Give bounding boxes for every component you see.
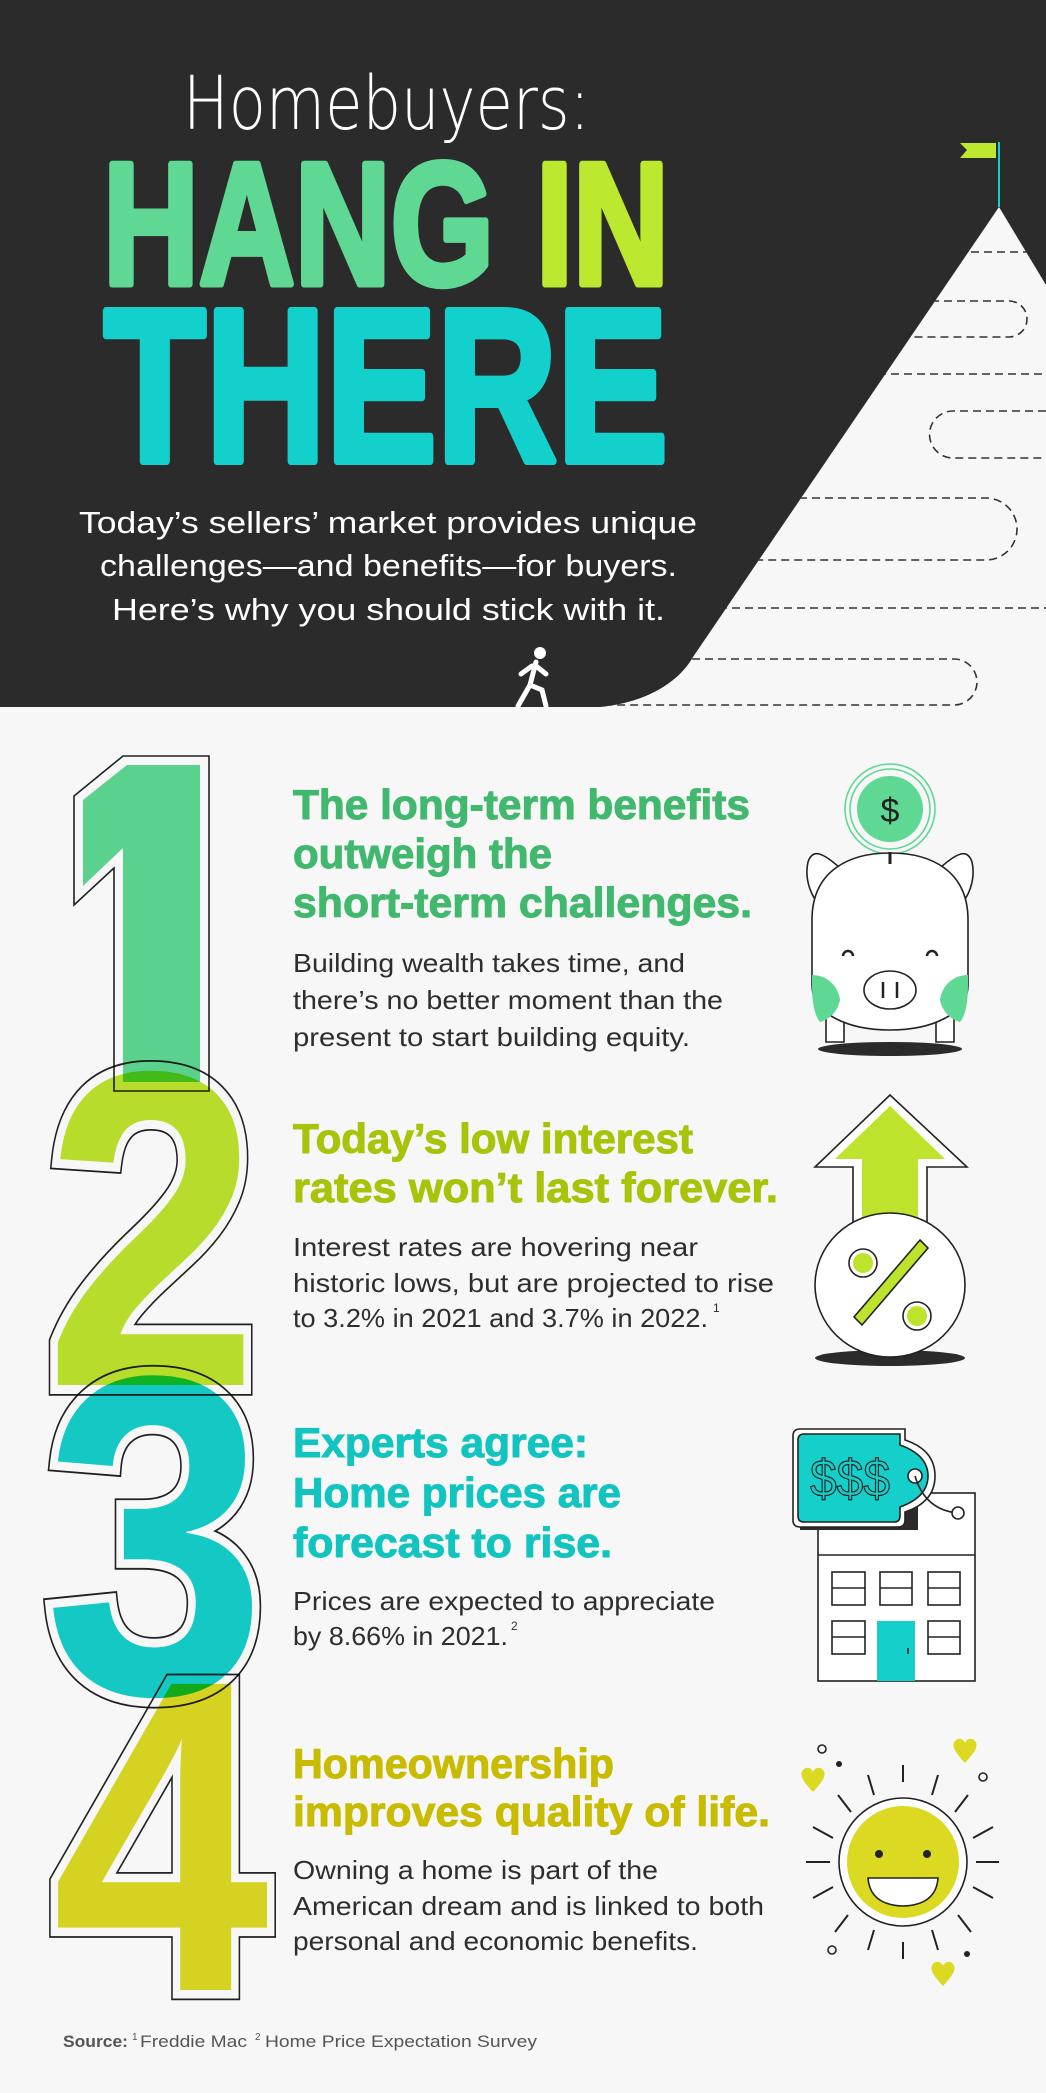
heading 4: Homeownership — [293, 1740, 614, 1787]
source footnote: 2 — [255, 2032, 261, 2043]
body 4: American dream and is linked to both — [293, 1891, 764, 1921]
body 3: 2 — [511, 1619, 518, 1633]
subtitle — [79, 505, 697, 627]
heading 2: Today’s low interest — [293, 1115, 693, 1162]
heading 2 — [293, 1115, 778, 1211]
body 2: 1 — [713, 1301, 720, 1315]
heading 4 — [293, 1740, 770, 1835]
source footnote: 1 — [132, 2032, 138, 2043]
source footnote: Freddie Mac — [140, 2032, 248, 2051]
body 4: Owning a home is part of the — [293, 1855, 658, 1885]
heading 1: short-term challenges. — [293, 879, 752, 926]
subtitle: Here’s why you should stick with it. — [112, 592, 665, 627]
section 4 text — [293, 1740, 770, 1956]
section 3 text — [293, 1419, 715, 1651]
section 2 text — [293, 1115, 778, 1333]
heading 3: Experts agree: — [293, 1419, 588, 1466]
heading 1 — [293, 781, 752, 926]
title: THERE: THERE — [104, 265, 668, 508]
heading 2: rates won’t last forever. — [293, 1164, 778, 1211]
subtitle: Today’s sellers’ market provides unique — [79, 505, 697, 540]
heading 3 — [293, 1419, 621, 1566]
heading 1: The long-term benefits — [293, 781, 750, 828]
icon: piggy bank — [807, 764, 973, 1056]
body 1 — [293, 948, 723, 1052]
body 1: there’s no better moment than the — [293, 985, 723, 1015]
body 2: Interest rates are hovering near — [293, 1232, 698, 1262]
heading 3: forecast to rise. — [293, 1519, 612, 1566]
source footnote: Home Price Expectation Survey — [265, 2032, 538, 2051]
number 1 — [74, 756, 209, 1091]
flag — [960, 142, 999, 207]
number 2: 2 — [45, 978, 259, 1481]
body 2: historic lows, but are projected to rise — [293, 1268, 774, 1298]
body 2 — [293, 1232, 774, 1333]
icon: smiling sun — [801, 1739, 999, 1986]
number 3: 3 — [44, 1281, 266, 1790]
icon: house with price tag — [793, 1429, 975, 1681]
number 3: 3 — [44, 1281, 266, 1790]
icon: piggy bank: $ — [881, 792, 900, 830]
source footnote — [63, 2032, 538, 2051]
body 4: personal and economic benefits. — [293, 1926, 698, 1956]
mountain — [560, 207, 1046, 707]
heading 3: Home prices are — [293, 1469, 621, 1516]
body 2: to 3.2% in 2021 and 3.7% in 2022. — [293, 1303, 708, 1333]
title: Homebuyers: Homebuyers: — [183, 61, 590, 147]
number 2: 2 — [45, 978, 259, 1481]
number 3: 3 — [44, 1281, 266, 1790]
body 4 — [293, 1855, 764, 1956]
body 3: by 8.66% in 2021. — [293, 1621, 508, 1651]
icon: arrow with percent — [815, 1095, 967, 1366]
body 1: Building wealth takes time, and — [293, 948, 685, 978]
heading 1: outweigh the — [293, 830, 552, 877]
heading 4: improves quality of life. — [293, 1788, 770, 1835]
number 4: 4 — [52, 1587, 272, 2085]
walker — [518, 647, 546, 706]
source footnote: Source: — [63, 2032, 128, 2051]
number 4: 4 — [52, 1587, 272, 2085]
subtitle: challenges—and benefits—for buyers. — [100, 548, 677, 583]
title: HANG IN: IN — [536, 126, 669, 321]
number 2: 2 — [45, 978, 259, 1481]
title: HANG IN: HANG — [103, 126, 494, 321]
header panel — [0, 0, 1046, 707]
section 1 text — [293, 781, 752, 1052]
icon: house with price tag: $$$ — [810, 1450, 890, 1508]
body 1: present to start building equity. — [293, 1022, 690, 1052]
body 3 — [293, 1586, 715, 1651]
number 4: 4 — [52, 1587, 272, 2085]
body 3: Prices are expected to appreciate — [293, 1586, 715, 1616]
